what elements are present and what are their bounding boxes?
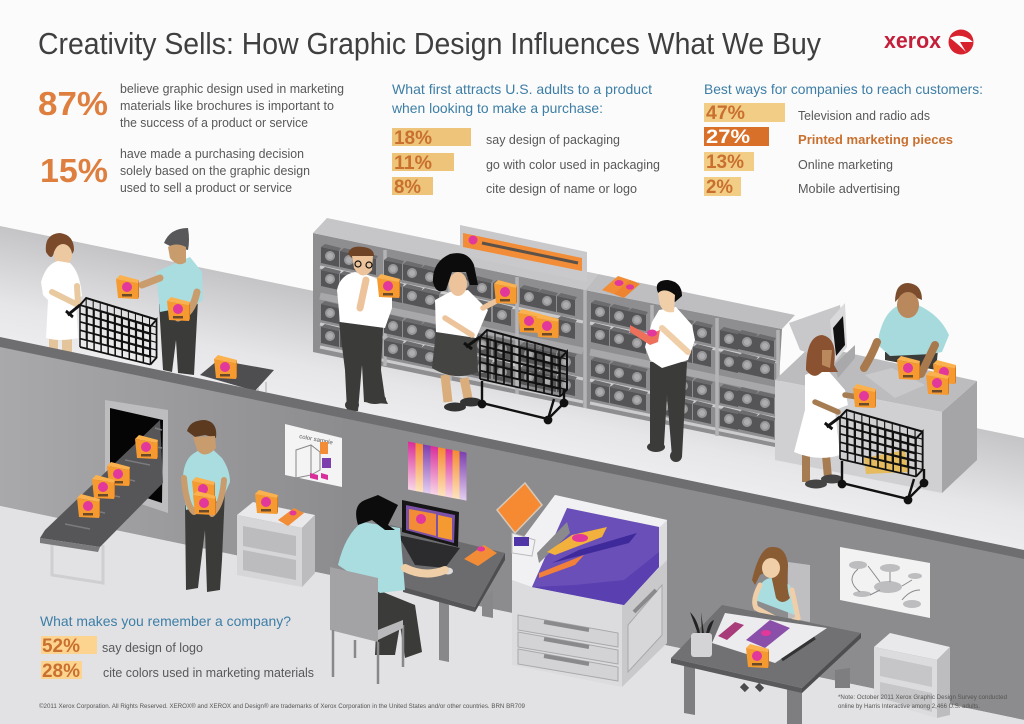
panel: best ways to reach customers: Online marketing [798,158,893,172]
second white cabinet [874,633,950,718]
cash register [789,303,855,378]
stat: 87%: believe graphic design used in marketing [120,82,344,96]
stat: 15%: have made a purchasing decision [120,147,304,161]
panel: what first attracts: 18% [394,127,432,149]
designer desk with laptop [390,500,505,662]
upper floor: retail store [0,226,1024,560]
footnote: online by Harris Interactive among 2,466 U.S. adults. [838,704,980,710]
figure: woman sketching at desk [752,547,810,628]
panel: what first attracts: say design of packaging [486,133,620,147]
footnote [838,695,1007,710]
figure: man in teal shirt holding boxes [116,228,203,375]
figure: man with glasses reading box [337,247,400,411]
hatch window [105,400,168,513]
ledge between floors [0,337,1024,560]
panel: what makes you remember a company: 52% [42,635,80,657]
stat: 87%: 87% [38,85,108,122]
checkout counter [775,345,977,493]
panel: what first attracts: go with color used in packaging [486,158,660,172]
panel: best ways to reach customers: Television and radio ads [798,109,930,123]
printer [497,483,667,687]
products on shelf top [602,276,640,298]
panel: best ways to reach customers: Printed marketing pieces [798,133,953,147]
panel: what first attracts: 8% [394,176,421,198]
shelf sign [460,225,587,282]
lower wall [0,347,1024,720]
figure: cashier [878,283,949,370]
panel: what makes you remember a company: 28% [42,660,80,682]
conveyor belt with boxes [40,420,163,583]
panel: what makes you remember a company [40,613,314,682]
footnote: *Note: October 2011 Xerox Graphic Design Survey conducted [838,695,1007,701]
figure: customer at checkout with cart [794,335,927,503]
panel: best ways to reach customers: 47% [706,102,745,124]
white storage cabinet with boxes [237,490,315,587]
panel: best ways to reach customers: 2% [706,176,733,198]
lower floor [0,506,1024,724]
stat: 15%: used to sell a product or service [120,181,292,195]
figure: designer at computer on chair [330,495,445,684]
drawing desk with pen cup and artwork [671,605,861,724]
panel: store shelves [313,218,795,447]
stat: 15%: solely based on the graphic design [120,164,310,178]
panel: what makes you remember a company: What makes you remember a company? [40,613,291,629]
stat: 15% [40,147,310,195]
poster: color sample [285,424,342,487]
poster: color sample: color sample [299,434,334,447]
stat: 87% [38,82,344,130]
panel: what first attracts [391,81,660,198]
figure: woman with shopping cart [41,233,157,365]
figure: man carrying boxes [183,420,230,592]
stat: 15%: 15% [40,152,108,189]
panel: what makes you remember a company: cite colors used in marketing materials [103,666,314,680]
footer copyright: ©2011 Xerox Corporation. All Rights Reserved. XEROX® and XEROX and Design® are trademarks of Xerox Corporation in the United States and/or other countries. BRN BR709 [39,703,526,710]
panel: what first attracts: when looking to make a purchase: [391,100,603,116]
panel: what makes you remember a company: say design of logo [102,641,203,655]
panel: best ways to reach customers: Best ways for companies to reach customers: [704,81,983,97]
panel: best ways to reach customers: 13% [706,151,744,173]
panel: what first attracts: cite design of name or logo [486,182,637,196]
cashier arms and boxes [864,342,956,395]
poster: colour swatches [408,442,466,501]
product display table [200,355,274,392]
panel: what first attracts: 11% [394,152,432,174]
poster: mind map [840,547,930,618]
panel: best ways to reach customers: 27% [706,126,750,148]
stat: 87%: the success of a product or service [120,116,308,130]
logo: xerox: xerox [884,28,942,53]
stat: 87%: materials like brochures is important to [120,99,334,113]
panel: best ways to reach customers: Mobile advertising [798,182,900,196]
logo: xerox [884,28,974,54]
panel: what first attracts: What first attracts U.S. adults to a product [392,81,652,97]
figure: man reading a book [630,280,695,462]
panel: best ways to reach customers [704,81,983,198]
figure: woman with black hair and cart [432,253,567,423]
title: Creativity Sells: How Graphic Design Influences What We Buy [38,27,822,61]
